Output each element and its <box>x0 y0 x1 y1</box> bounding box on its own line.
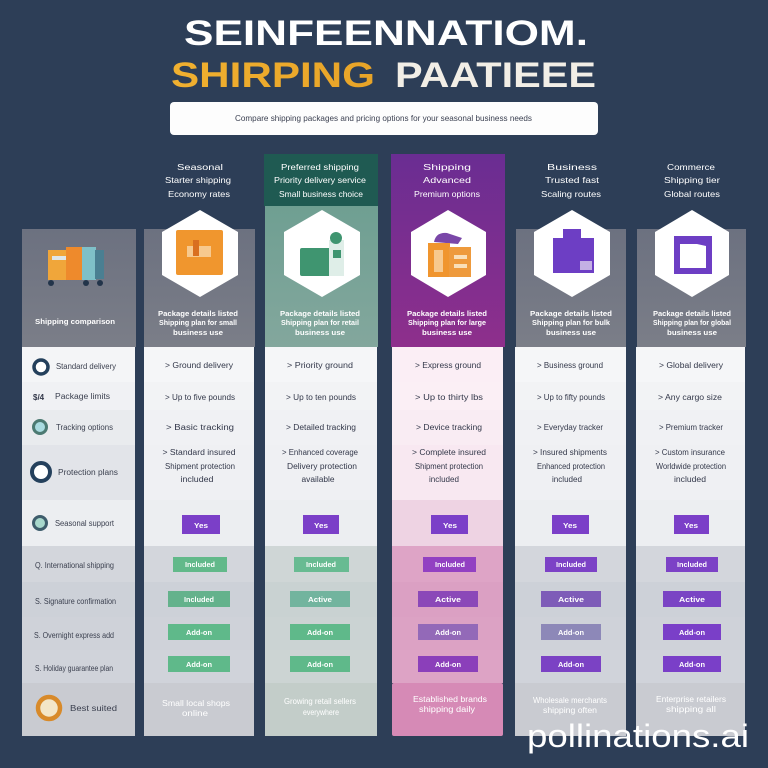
feature rows: S. Signature confirmation <box>35 597 116 606</box>
header: package 1: Shipping plan for small <box>159 320 237 327</box>
feature rows: Enterprise retailers <box>656 695 726 704</box>
feature rows: > Ground delivery <box>165 361 233 370</box>
subtitle bar: Compare shipping packages and pricing options for your seasonal business needs <box>235 113 532 123</box>
header: package 3: business use <box>422 330 472 337</box>
heading: package 2: Preferred shipping <box>281 162 359 172</box>
feature rows: > Express ground <box>415 361 481 370</box>
feature rows: Included <box>556 562 586 569</box>
feature rows: > Up to five pounds <box>165 393 235 402</box>
header: package 3: Package details listed <box>407 311 487 318</box>
title <box>171 14 596 95</box>
feature rows: Add-on <box>558 630 584 637</box>
panel: package column 2 (green highlight) <box>264 154 378 736</box>
icon: orange parcels <box>411 210 486 297</box>
feature rows: Active <box>435 597 461 604</box>
feature rows: Delivery protection <box>287 462 357 471</box>
feature rows: > Enhanced coverage <box>282 448 359 457</box>
header: package 2 <box>265 206 378 347</box>
feature rows: Protection plans <box>58 468 118 477</box>
feature rows <box>515 347 626 736</box>
watermark: pollinations.ai <box>527 718 749 754</box>
feature rows: online <box>182 709 209 718</box>
panel: package column 4 <box>515 162 626 736</box>
feature rows: Active <box>679 597 705 604</box>
heading: package 2: Small business choice <box>279 189 363 199</box>
heading: package 4: Business <box>547 162 597 172</box>
header: package 5: Package details listed <box>653 311 731 318</box>
feature rows: > Up to thirty lbs <box>415 393 483 402</box>
header: package 3: Shipping plan for large <box>408 320 486 327</box>
feature rows: Tracking options <box>56 423 113 432</box>
feature rows: Add-on <box>679 630 705 637</box>
heading: package 2: Priority delivery service <box>274 175 366 185</box>
feature rows: > Device tracking <box>416 423 482 432</box>
feature rows: > Up to ten pounds <box>286 393 356 402</box>
header: package 3 <box>391 154 505 347</box>
feature rows: Included <box>306 562 336 569</box>
panel: feature label column <box>22 229 136 736</box>
feature rows: > Everyday tracker <box>537 423 603 432</box>
feature rows: shipping daily <box>419 705 475 714</box>
feature rows: Yes <box>563 523 577 530</box>
header: package 5 <box>637 229 746 347</box>
header: package 2: Package details listed <box>280 311 360 318</box>
feature rows: Standard delivery <box>56 362 116 371</box>
header: package 4: Shipping plan for bulk <box>532 320 610 327</box>
feature rows: Yes <box>314 523 328 530</box>
header: package 3: Premium options <box>414 189 480 199</box>
feature rows: Established brands <box>413 695 487 704</box>
feature rows: > Insured shipments <box>533 448 607 457</box>
feature rows <box>636 347 745 736</box>
feature rows: Q. International shipping <box>35 561 114 570</box>
panel: package column 1 <box>144 162 255 736</box>
icon: luggage stack <box>48 247 104 286</box>
header: feature column: Shipping comparison <box>35 319 115 326</box>
header: package 3: Advanced <box>423 175 471 185</box>
header: package 5: business use <box>667 330 717 337</box>
feature rows <box>265 347 377 736</box>
feature rows: Add-on <box>435 630 461 637</box>
heading: package 1: Starter shipping <box>165 175 231 185</box>
feature rows: Add-on <box>558 662 584 669</box>
header: package 4: Package details listed <box>530 311 612 318</box>
feature rows: included <box>674 475 706 484</box>
header: package 1: business use <box>173 330 223 337</box>
feature rows: Small local shops <box>162 699 230 708</box>
feature rows: Yes <box>194 523 208 530</box>
feature rows: > Business ground <box>537 361 603 370</box>
heading: package 4 <box>541 162 601 199</box>
heading: package 5: Commerce <box>667 162 715 172</box>
feature rows: included <box>552 475 582 484</box>
feature rows: Add-on <box>307 662 333 669</box>
header: package 1: Package details listed <box>158 311 238 318</box>
feature rows: > Up to fifty pounds <box>537 393 605 402</box>
panel: package column 5 <box>636 162 746 736</box>
feature rows: > Complete insured <box>412 448 486 457</box>
feature rows: S. Overnight express add <box>34 631 114 640</box>
feature rows: Add-on <box>435 662 461 669</box>
feature rows: Shipment protection <box>415 462 483 471</box>
header: package 3: Shipping <box>423 162 471 172</box>
feature rows: Growing retail sellers <box>284 697 356 706</box>
heading: package 1 <box>165 162 231 199</box>
feature rows: Included <box>184 597 214 604</box>
feature rows: shipping all <box>666 705 716 714</box>
feature rows: included <box>180 475 214 484</box>
header: package 5: Shipping plan for global <box>653 320 731 327</box>
icon: purple box <box>534 210 610 297</box>
icon: orange package <box>162 210 238 297</box>
feature rows: > Standard insured <box>162 448 236 457</box>
feature rows: included <box>429 475 459 484</box>
feature rows <box>22 347 135 736</box>
feature rows: Package limits <box>55 392 110 401</box>
feature rows: everywhere <box>303 708 339 717</box>
feature rows: Active <box>558 597 584 604</box>
feature rows: > Global delivery <box>659 361 723 370</box>
icon: purple document <box>655 210 729 297</box>
heading: package 1: Economy rates <box>168 189 230 199</box>
feature rows: Seasonal support <box>55 519 115 528</box>
feature rows: Included <box>677 562 707 569</box>
title: PAATIEEE <box>395 56 596 95</box>
icon: green bag <box>284 210 360 297</box>
feature rows: Included <box>435 562 465 569</box>
feature rows: > Detailed tracking <box>286 423 356 432</box>
feature rows: > Any cargo size <box>658 393 723 402</box>
feature rows: Active <box>308 597 332 604</box>
feature rows: shipping often <box>543 706 597 715</box>
feature rows: Best suited <box>70 704 117 713</box>
feature rows: > Basic tracking <box>166 423 234 432</box>
feature rows: Add-on <box>186 662 212 669</box>
title: SEINFEENNATIOM. <box>184 14 588 53</box>
feature rows: Worldwide protection <box>656 462 726 471</box>
header: package 1 <box>144 229 255 347</box>
subtitle bar <box>170 102 598 135</box>
feature rows: Wholesale merchants <box>533 696 607 705</box>
feature rows: Included <box>185 562 215 569</box>
header: package 2: business use <box>295 330 345 337</box>
heading: package 5 <box>664 162 720 199</box>
feature rows: Yes <box>443 523 457 530</box>
feature rows: Add-on <box>307 630 333 637</box>
heading: package 4: Trusted fast <box>545 175 600 185</box>
title: SHIRPING <box>171 56 375 95</box>
icons: feature row markers: $/4 <box>33 393 45 402</box>
feature rows <box>144 347 254 736</box>
header: package 2: Shipping plan for retail <box>281 320 359 327</box>
feature rows: Yes <box>684 523 698 530</box>
feature rows: Add-on <box>186 630 212 637</box>
heading: package 5: Shipping tier <box>664 175 720 185</box>
header: feature column <box>22 229 136 347</box>
heading: package 1: Seasonal <box>177 162 223 172</box>
header: package 4: business use <box>546 330 596 337</box>
feature rows: > Priority ground <box>287 361 353 370</box>
header: package 4 <box>516 229 626 347</box>
panel: package column 3 (purple highlight) <box>391 154 505 736</box>
heading: package 5: Global routes <box>664 189 720 199</box>
feature rows: > Custom insurance <box>655 448 726 457</box>
icons: feature row markers <box>32 360 60 719</box>
feature rows: available <box>302 475 335 484</box>
feature rows: Add-on <box>679 662 705 669</box>
heading: package 4: Scaling routes <box>541 189 601 199</box>
heading: package 2 <box>264 154 378 206</box>
feature rows <box>392 347 503 736</box>
feature rows: Shipment protection <box>165 462 235 471</box>
feature rows: > Premium tracker <box>659 423 723 432</box>
feature rows: S. Holiday guarantee plan <box>35 664 113 673</box>
feature rows: Enhanced protection <box>537 462 605 471</box>
